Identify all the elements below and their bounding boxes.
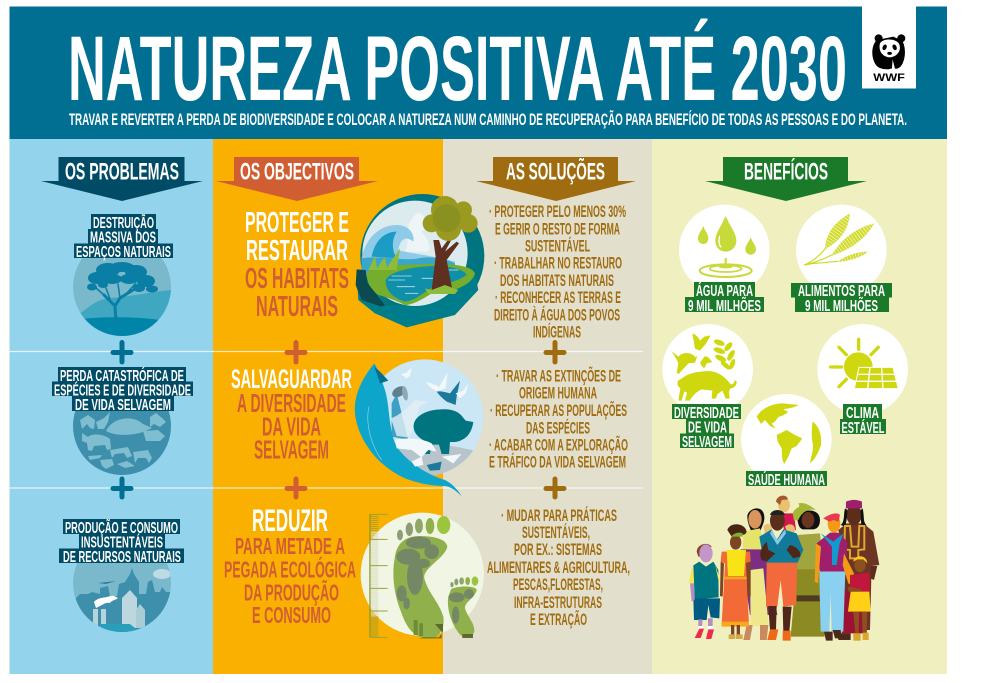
divider lines (10, 352, 643, 488)
label: alimentos (791, 283, 892, 315)
label: produção e consumo: DE RECURSOS NATURAIS (63, 549, 181, 566)
text: soluções habitats: · RECONHECER AS TERRAS E (495, 289, 621, 307)
label: alimentos: ALIMENTOS PARA (798, 283, 885, 300)
icon: wildlife globe with leaf (355, 359, 485, 496)
text: salvaguardar: SALVAGUARDAR (231, 364, 352, 394)
label: diversidade: DE VIDA (688, 419, 727, 436)
text: proteger e restaurar: RESTAURAR (246, 235, 348, 267)
small child (848, 556, 871, 641)
label: destruição (74, 214, 173, 261)
label: água: 9 MIL MILHÕES (688, 297, 761, 315)
text: proteger e restaurar: OS HABITATS (245, 263, 349, 295)
text: reduzir: E CONSUMO (252, 602, 331, 628)
text: soluções habitats: INDÍGENAS (533, 322, 581, 342)
label: clima (840, 404, 886, 437)
text: soluções habitats: DIREITO À ÁGUA DOS POVOS (494, 306, 620, 324)
label: diversidade: SELVAGEM (682, 434, 732, 451)
icon: footprints (361, 513, 484, 639)
icon: globe (741, 394, 832, 485)
label: perda catastrófica: PERDA CATASTRÓFICA DE (60, 367, 184, 385)
icon: plus (287, 342, 305, 362)
banner: os objectivos (216, 157, 378, 201)
text: soluções vida selvagem: · RECUPERAR AS POPULAÇÕES (490, 400, 627, 420)
text: soluções habitats: · TRABALHAR NO RESTAURO (494, 254, 622, 272)
icon: plus (546, 342, 564, 362)
text: proteger e restaurar: NATURAIS (256, 291, 338, 323)
text: soluções habitats: E GERIR O RESTO DE FORMA (495, 220, 620, 238)
text: reduzir (224, 502, 356, 628)
text: salvaguardar: SELVAGEM (254, 436, 329, 464)
icon: wildlife (662, 324, 753, 415)
big foot (393, 516, 450, 639)
text: soluções vida selvagem: DAS ESPÉCIES (526, 418, 590, 438)
banner: os problemas (41, 157, 203, 201)
text: proteger e restaurar: PROTEGER E (245, 207, 349, 239)
label: diversidade (672, 404, 741, 451)
text: soluções pegada: SUSTENTÁVEIS, (522, 523, 590, 542)
label: clima: CLIMA (846, 405, 879, 422)
text: soluções habitats: DOS HABITATS NATURAIS (500, 272, 614, 290)
icon: habitat globe (356, 194, 484, 327)
text: reduzir: REDUZIR (252, 502, 328, 538)
label: destruição: ESPAÇOS NATURAIS (76, 244, 171, 261)
text: soluções habitats: · PROTEGER PELO MENOS 30% (489, 203, 626, 221)
banner: os problemas: OS PROBLEMAS (65, 158, 179, 186)
text: salvaguardar: DA VIDA (262, 414, 321, 442)
man centre (759, 510, 803, 641)
text: soluções vida selvagem: E TRÁFICO DA VIDA SELVAGEM (489, 452, 626, 472)
icon: plus (113, 479, 131, 497)
child on shoulders (763, 496, 796, 547)
label: água: ÁGUA PARA (696, 283, 753, 300)
icon: plus (287, 479, 305, 497)
text: soluções pegada: INFRA-ESTRUTURAS (514, 594, 602, 612)
icon: animals circle (73, 411, 171, 475)
text: soluções pegada: PESCAS,FLORESTAS, (513, 576, 603, 594)
banner: os objectivos: OS OBJECTIVOS (240, 158, 354, 186)
label: perda catastrófica (52, 367, 193, 414)
label: perda catastrófica: ESPÉCIES E DE DIVERSIDADE (54, 382, 191, 399)
panel: benefícios (662, 157, 908, 641)
text: proteger e restaurar (245, 207, 349, 323)
label: produção e consumo: INSUSTENTÁVEIS (81, 534, 163, 551)
label: perda catastrófica: DE VIDA SELVAGEM (75, 397, 171, 414)
text: soluções pegada: ALIMENTARES & AGRICULTURA, (487, 559, 630, 577)
label: produção e consumo (59, 519, 184, 566)
text: soluções pegada: E EXTRAÇÃO (530, 609, 587, 629)
label: clima: ESTÁVEL (842, 420, 884, 437)
label: destruição: MASSIVA DOS (90, 229, 156, 246)
text: soluções vida selvagem: · ACABAR COM A EXPLORAÇÃO (489, 434, 628, 454)
label: destruição: DESTRUIÇÃO (93, 214, 154, 232)
icon: plus (546, 479, 564, 497)
icon: wheat (796, 205, 887, 295)
panel: os problemas (41, 157, 203, 632)
woman behind (741, 508, 777, 640)
man pale (815, 513, 854, 641)
text: salvaguardar: A DIVERSIDADE (237, 390, 346, 418)
banner: benefícios (705, 157, 867, 201)
icon: city circle (73, 563, 171, 632)
label: diversidade: DIVERSIDADE (674, 405, 739, 422)
illustration: people (689, 496, 879, 641)
label: saúde: SAÚDE HUMANA (748, 471, 825, 489)
text: reduzir: PEGADA ECOLÓGICA (224, 556, 356, 582)
small foot (448, 576, 478, 638)
text: salvaguardar (231, 364, 352, 464)
icon: tree circle (73, 258, 171, 336)
banner: as soluções (476, 157, 636, 201)
boy (689, 544, 720, 639)
text: soluções pegada: POR EX.: SISTEMAS (514, 541, 602, 559)
text: reduzir: PARA METADE A (235, 533, 345, 559)
panel: as soluções (476, 157, 636, 629)
icon: climate (817, 324, 908, 415)
text: soluções habitats (489, 203, 626, 342)
tall man (838, 500, 879, 640)
label: alimentos: 9 MIL MILHÕES (805, 297, 878, 315)
header band (10, 6, 947, 139)
text: soluções vida selvagem: ORIGEM HUMANA (519, 384, 597, 402)
girl (720, 524, 751, 639)
ruler (370, 514, 388, 637)
label: produção e consumo: PRODUÇÃO E CONSUMO (65, 519, 178, 537)
WWF logo (862, 6, 916, 88)
text: soluções vida selvagem: · TRAVAR AS EXTINÇÕES DE (496, 366, 621, 386)
WWF wordmark: WWF (873, 72, 906, 84)
banner: as soluções: AS SOLUÇÕES (506, 158, 605, 186)
banner: benefícios: BENEFÍCIOS (744, 158, 828, 186)
text: soluções vida selvagem (489, 366, 628, 472)
icon: plus (113, 342, 131, 362)
text: soluções pegada (487, 506, 630, 629)
panel: os objectivos (216, 157, 485, 639)
label: água (685, 282, 764, 315)
text: soluções pegada: · MUDAR PARA PRÁTICAS (501, 506, 617, 525)
woman green (791, 503, 825, 637)
icon: water (679, 205, 770, 295)
text: reduzir: DA PRODUÇÃO (244, 578, 339, 606)
text: soluções habitats: SUSTENTÁVEL (525, 236, 590, 256)
column backgrounds (10, 139, 947, 674)
label: saúde (746, 471, 827, 489)
